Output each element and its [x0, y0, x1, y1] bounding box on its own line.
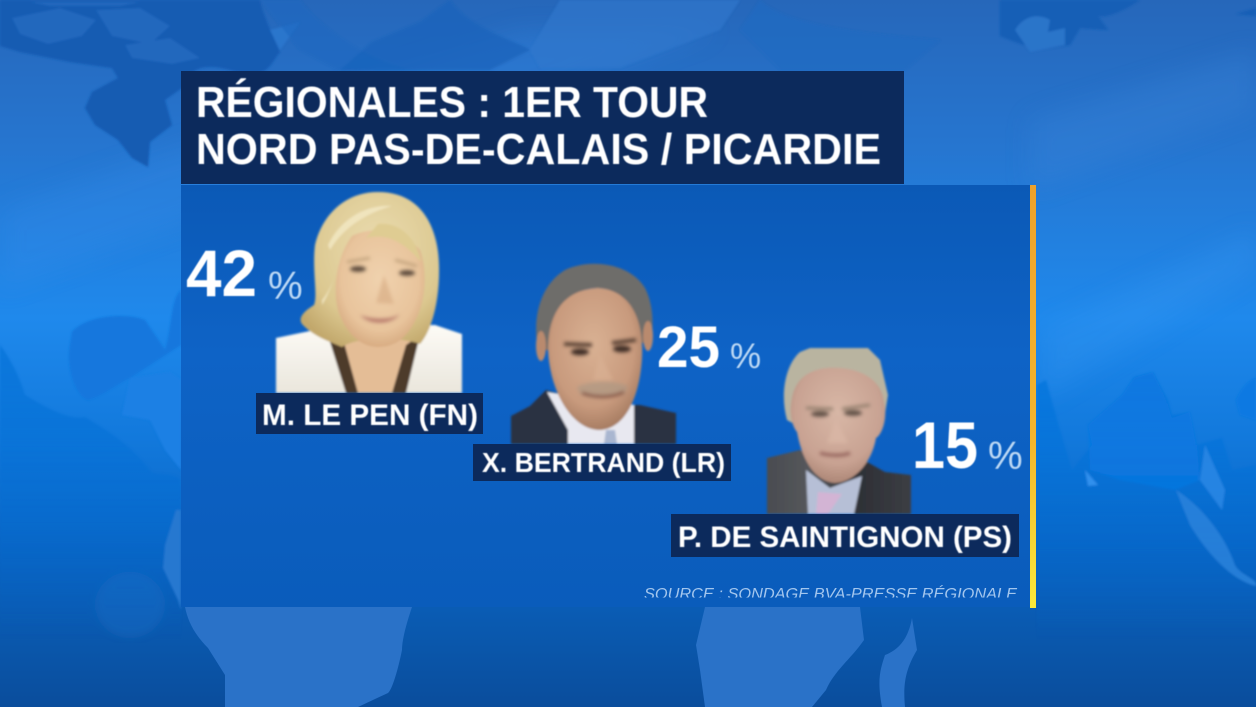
name label: P. de Saintignon: P. DE SAINTIGNON (PS): [678, 521, 1012, 554]
title block: NORD PAS-DE-CALAIS / PICARDIE: [196, 125, 881, 174]
light diagonal streaks: [0, 30, 1256, 400]
candidate: M. Le Pen: [186, 192, 483, 434]
percentage: 42: [186, 236, 303, 310]
yellow vertical bar: [1030, 185, 1036, 608]
map: North America and Arctic: [0, 0, 940, 167]
title block: [181, 71, 904, 184]
percentage: 25: %: [730, 337, 761, 376]
title block: RÉGIONALES : 1ER TOUR: [196, 77, 708, 127]
portrait: Bertrand: [511, 264, 676, 444]
main blue panel: [181, 185, 1030, 607]
map: Scandinavia and Asia top: [1000, 0, 1256, 52]
portrait: Le Pen: [276, 192, 462, 393]
percentage: 15: %: [988, 435, 1023, 478]
percentage: 25: [657, 315, 761, 380]
percentage: 42: %: [268, 265, 303, 308]
candidate: P. de Saintignon: [671, 348, 1023, 557]
map: Africa: [696, 607, 864, 707]
name label: X. Bertrand: X. BERTRAND (LR): [482, 447, 725, 478]
portrait: de Saintignon: [767, 348, 911, 514]
percentage: 25: 25: [657, 315, 720, 380]
source note: SOURCE : SONDAGE BVA-PRESSE RÉGIONALE: [644, 584, 1017, 603]
map: Indian Ocean and Southeast Asia: [1037, 372, 1256, 640]
percentage: 15: 15: [912, 408, 978, 482]
map: Gulf of Mexico, Central America and Pacific: [0, 290, 181, 640]
candidate: X. Bertrand: [473, 264, 761, 481]
map: Madagascar: [879, 618, 917, 707]
percentage: 42: 42: [186, 236, 257, 310]
map: South America: [185, 607, 412, 707]
name label: M. Le Pen: M. LE PEN (FN): [262, 399, 478, 432]
percentage: 15: [912, 408, 1023, 482]
